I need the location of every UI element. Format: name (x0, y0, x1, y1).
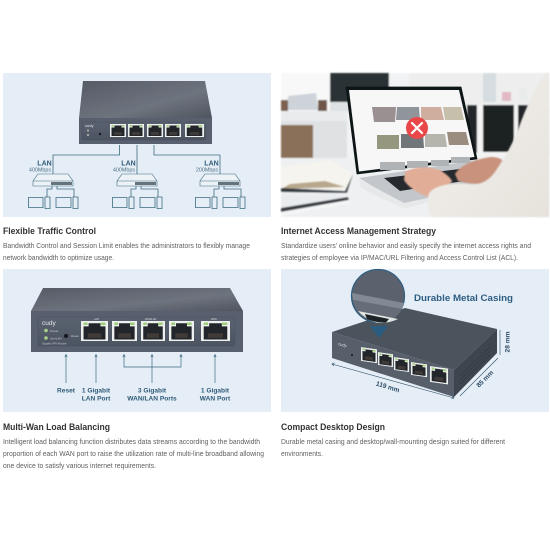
label: WAN/LAN ports: 3 Gigabit (138, 388, 166, 394)
magnifier callout (352, 270, 404, 338)
router front view: Sys/LAN (50, 336, 62, 340)
text block: flexible traffic control: Bandwidth Control and Session Limit enables the administrators to flexibly manage (3, 241, 250, 250)
dimension: depth: 85 mm (475, 369, 495, 389)
text block: flexible traffic control (3, 241, 250, 262)
text block: internet access management strategy: strategies of employee via IP/MAC/URL Filtering and Access Control List (ACL). (281, 253, 518, 262)
heading: multi-wan load balancing: Multi-Wan Load Balancing (3, 422, 110, 432)
LAN group 3 (196, 160, 245, 208)
panel background (281, 269, 549, 412)
router front view: Reset (71, 334, 79, 338)
router front view (31, 288, 243, 352)
network connection lines (53, 145, 220, 174)
panel: multi-wan load balancing (3, 269, 271, 412)
router front view: WAN (211, 318, 217, 321)
panel: laptop photo (281, 73, 550, 217)
text block: multi-wan load balancing: proportion of each WAN port to raise the utilization rate of multi-line broadband allowing (3, 449, 264, 458)
router front view: LAN (94, 318, 99, 321)
dimension: height: 28 mm (504, 331, 512, 352)
text block: internet access management strategy: Standardize users' online behavior and easily specify the internet access rights and (281, 241, 531, 250)
label: WAN port: 1 Gigabit (201, 388, 229, 394)
hands and sleeve (404, 73, 549, 217)
label: LAN port: 1 Gigabit (82, 388, 110, 394)
dimension: depth (460, 358, 498, 396)
panel: flexible traffic control (3, 73, 271, 217)
panel background (3, 269, 271, 412)
router illustration: cudy (85, 123, 93, 128)
laptop (346, 87, 489, 208)
LAN group 1: 400Mbps (29, 168, 51, 174)
router isometric view (332, 308, 497, 397)
LAN group 3: LAN (204, 160, 219, 168)
photo background (281, 73, 550, 217)
text block: multi-wan load balancing (3, 437, 264, 470)
arrows: port callouts (65, 354, 216, 383)
router front view: Gigabit VPN Router (42, 342, 67, 346)
LAN group 1: LAN (37, 160, 52, 168)
text block: internet access management strategy (281, 241, 531, 262)
label: WAN port: WAN Port (200, 396, 231, 402)
text block: multi-wan load balancing: one device to satisfy various internet requirements. (3, 461, 156, 470)
text block: compact desktop design: environments. (281, 449, 323, 458)
label: WAN/LAN ports: WAN/LAN Ports (127, 396, 177, 402)
label: reset: Reset (57, 388, 76, 394)
router front view: cudy (42, 320, 56, 327)
dimension: width (332, 363, 454, 399)
panel: compact desktop design (281, 269, 549, 412)
text block: multi-wan load balancing: Intelligent load balancing function distributes data streams according to the bandwidth (3, 437, 260, 446)
heading: compact desktop design: Compact Desktop Design (281, 422, 385, 432)
heading: flexible traffic control: Flexible Traffic Control (3, 226, 96, 236)
label: durable metal casing: Durable Metal Casing (414, 293, 513, 303)
label: LAN port: LAN Port (82, 396, 111, 402)
dimension: width: 119 mm (375, 381, 400, 394)
LAN group 3: 200Mbps (196, 168, 218, 174)
LAN group 2: LAN (121, 160, 136, 168)
panel background (3, 73, 271, 217)
text block: compact desktop design (281, 437, 505, 458)
LAN group 1 (28, 160, 78, 208)
icon: red cross (406, 117, 428, 139)
router illustration (79, 81, 212, 144)
router front view: Power (50, 329, 59, 333)
heading: internet access management strategy: Internet Access Management Strategy (281, 226, 437, 236)
text block: flexible traffic control: network bandwidth to optimize usage. (3, 253, 114, 262)
text block: compact desktop design: Durable metal casing and desktop/wall-mounting design suited for different (281, 437, 505, 446)
LAN group 2: 400Mbps (113, 168, 135, 174)
LAN group 2 (112, 160, 162, 208)
dimension: height (500, 330, 512, 355)
router front view: WAN/LAN (145, 318, 156, 321)
router isometric view: cudy (338, 341, 347, 348)
